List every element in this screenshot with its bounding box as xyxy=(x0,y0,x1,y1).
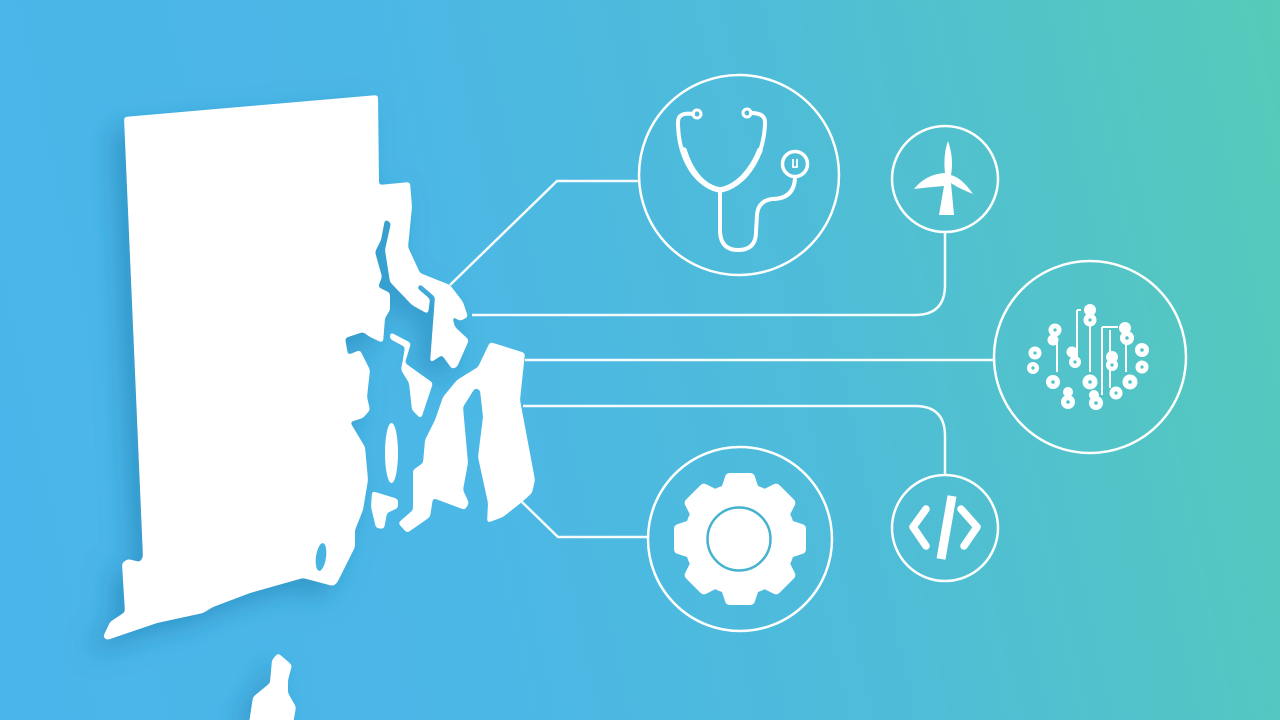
map: Rhode Island xyxy=(103,95,535,720)
line to gear xyxy=(522,502,648,537)
connector lines xyxy=(450,181,993,537)
line to brain xyxy=(525,359,993,361)
icon: stethoscope xyxy=(639,75,839,275)
code left bracket xyxy=(913,509,926,546)
stethoscope chest piece xyxy=(782,152,808,176)
code circle xyxy=(892,475,998,581)
stethoscope tubing xyxy=(678,113,795,250)
line to code xyxy=(523,406,945,474)
line to wind turbine xyxy=(472,233,945,315)
stethoscope tubing thick section xyxy=(684,150,760,190)
stethoscope earpieces xyxy=(693,109,751,118)
turbine shape xyxy=(914,141,973,215)
map: Prudence Island xyxy=(390,332,433,419)
map: salt pond xyxy=(314,542,328,572)
gear circle xyxy=(648,447,832,631)
map: small bay island xyxy=(371,491,398,529)
gear inner ring xyxy=(708,508,770,570)
icon: wind turbine xyxy=(892,126,998,232)
brain circuit lines xyxy=(1057,310,1126,395)
map: Conanicut Island xyxy=(385,423,398,483)
code right bracket xyxy=(961,509,977,546)
stethoscope circle xyxy=(639,75,839,275)
brain node centers xyxy=(1031,318,1144,405)
icon: code brackets xyxy=(892,475,998,581)
map: Block Island xyxy=(248,653,296,720)
icon: gear xyxy=(648,447,832,631)
icon: circuit brain xyxy=(994,261,1186,453)
map: Aquidneck and Conanicut land xyxy=(398,342,535,533)
line to stethoscope xyxy=(450,181,640,285)
turbine circle xyxy=(892,126,998,232)
map: mainland xyxy=(103,95,469,640)
code slash xyxy=(941,496,952,559)
stethoscope chest piece center xyxy=(793,159,797,167)
gear shape xyxy=(674,473,806,605)
brain circuit nodes xyxy=(1027,304,1149,410)
brain circle xyxy=(994,261,1186,453)
